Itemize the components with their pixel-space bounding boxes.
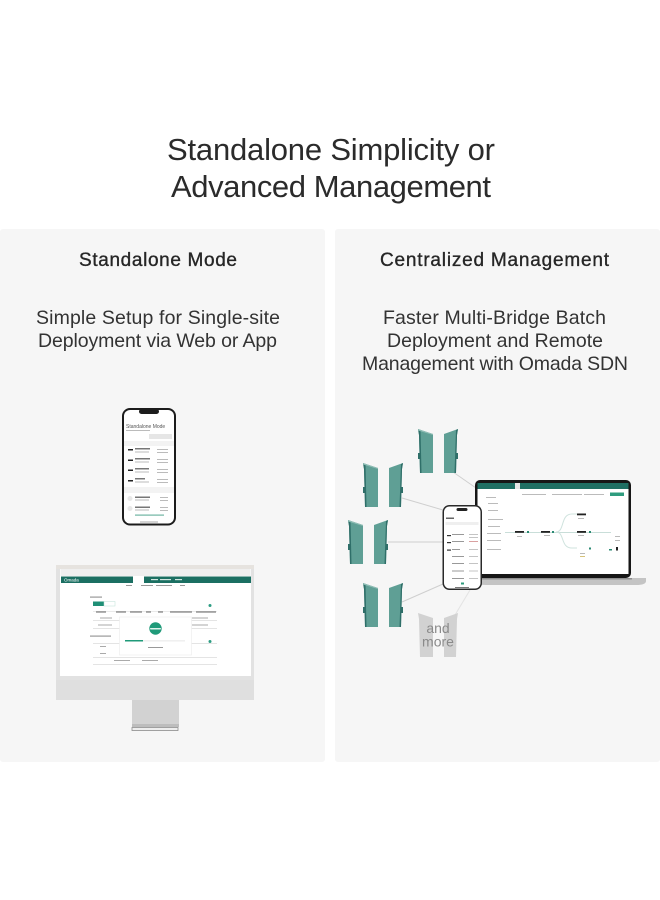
title: Standalone Simplicity or xyxy=(167,132,495,167)
icon: phone with device list xyxy=(442,505,482,590)
title: Advanced Management xyxy=(171,169,491,204)
text: standalone description xyxy=(36,307,280,352)
text: centralized description xyxy=(362,307,628,375)
text: centralized description: Faster Multi-Bridge Batch xyxy=(383,307,606,329)
icon: phone with standalone app xyxy=(122,408,176,526)
title xyxy=(167,132,495,204)
icon: grey bridge with and more label: and xyxy=(426,620,450,636)
heading: centralized management: Centralized Management xyxy=(380,250,610,271)
icon: bridge lower left xyxy=(363,583,403,627)
text: centralized description: Management with Omada SDN xyxy=(362,353,628,375)
icon: bridge middle left xyxy=(348,520,388,564)
icon: grey bridge with and more label: more xyxy=(422,634,454,650)
icon: phone with standalone app: Standalone Mode xyxy=(126,424,165,430)
text: standalone description: Deployment via Web or App xyxy=(38,330,277,352)
text: centralized description: Deployment and Remote xyxy=(387,330,603,352)
icon: desktop monitor with web interface xyxy=(56,565,254,730)
icon: bridge top xyxy=(418,429,458,473)
icon: desktop monitor with web interface: Omada xyxy=(64,578,79,582)
panel: centralized management xyxy=(335,229,660,762)
icon: bridge upper left xyxy=(363,463,403,507)
icon: grey bridge with and more label xyxy=(418,613,458,657)
heading: standalone mode: Standalone Mode xyxy=(79,250,237,271)
connection lines xyxy=(388,472,476,615)
text: standalone description: Simple Setup for Single-site xyxy=(36,307,280,329)
panel: standalone mode xyxy=(0,229,325,762)
icon: laptop with network topology xyxy=(475,480,646,585)
